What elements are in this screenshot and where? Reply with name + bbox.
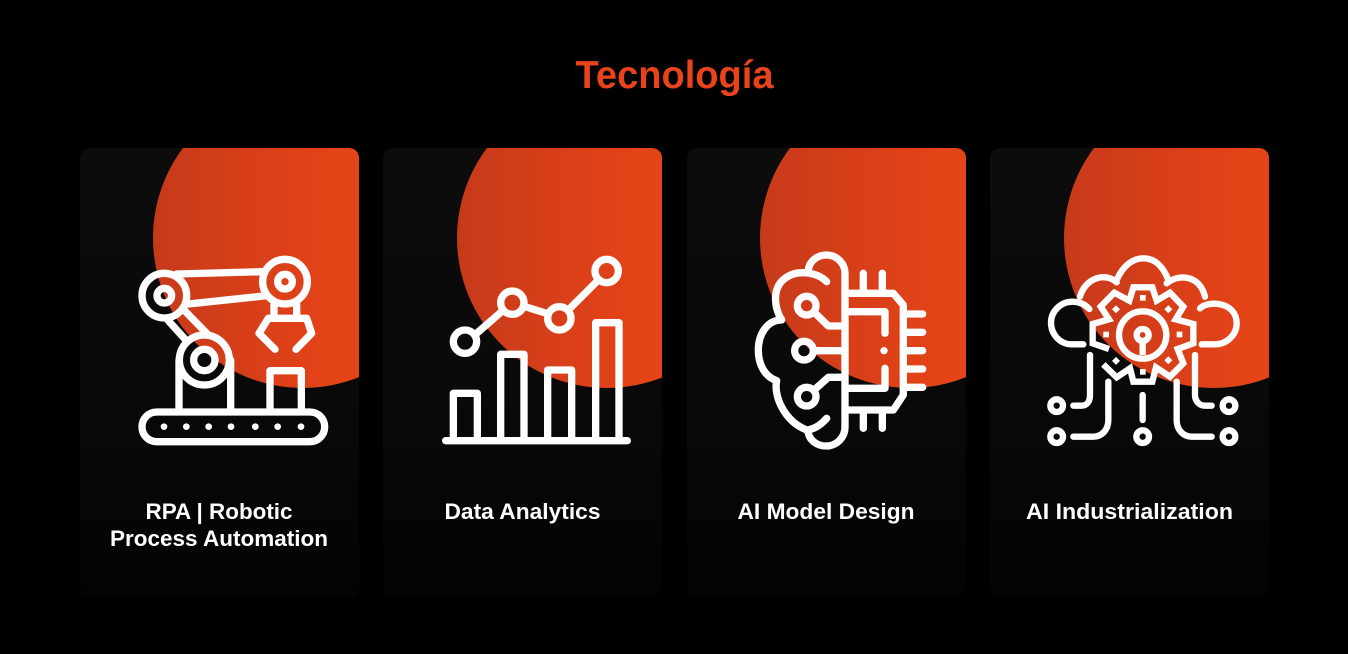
icon: chart with trend line (446, 259, 627, 441)
panel: AI Industrialization (990, 148, 1269, 519)
card background: Data Analytics (383, 148, 662, 598)
label: RPA (110, 499, 328, 551)
title: Tecnología (576, 54, 774, 97)
panel: AI Model Design (687, 148, 966, 524)
label: Data Analytics: Data Analytics (444, 499, 600, 524)
card background: AI Model Design (687, 148, 966, 598)
orange circle: RPA (153, 148, 359, 388)
icon: cloud, gear and circuits (1050, 258, 1237, 443)
orange circle: AI Model Design (760, 148, 966, 388)
label: AI Industrialization: AI Industrialization (1026, 499, 1233, 524)
panel: RPA (80, 148, 359, 546)
orange circle: AI Industrialization (1064, 148, 1269, 388)
label: RPA: Process Automation (110, 526, 328, 551)
label: RPA: RPA | Robotic (146, 499, 292, 524)
label: AI Model Design: AI Model Design (738, 499, 914, 524)
icon: brain and chip (758, 255, 923, 446)
orange circle: Data Analytics (457, 148, 662, 388)
icon: robotic arm (142, 259, 325, 442)
card background: RPA (80, 148, 359, 598)
card background: AI Industrialization (990, 148, 1269, 598)
panel: Data Analytics (383, 148, 662, 524)
